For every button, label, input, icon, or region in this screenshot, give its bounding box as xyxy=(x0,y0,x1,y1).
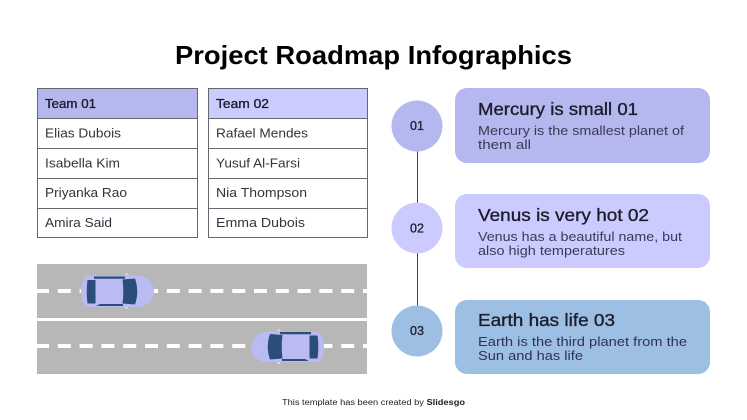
title: Project Roadmap Infographics xyxy=(175,40,572,70)
step circle 01 xyxy=(392,100,442,152)
footer credit: This template has been created by Slidesgo xyxy=(282,398,465,407)
icon: car facing left xyxy=(251,330,324,364)
table: team 02: Yusuf Al-Farsi xyxy=(216,156,300,170)
table: team 01: Priyanka Rao xyxy=(45,186,127,200)
step circle 03: 03 xyxy=(410,324,424,338)
panel: venus: Venus has a beautiful name, but xyxy=(478,230,683,244)
step circle 01: 01 xyxy=(410,119,424,133)
step circle 02 xyxy=(392,202,442,254)
road: top lane with car xyxy=(37,264,367,318)
panel: earth: Earth is the third planet from the xyxy=(478,335,687,349)
table: team 02: Nia Thompson xyxy=(216,186,307,200)
table: team 02 xyxy=(208,88,368,238)
table: team 02: Team 02 xyxy=(216,97,269,111)
step circle 02: 02 xyxy=(410,222,424,236)
table: team 02: Emma Dubois xyxy=(216,216,305,230)
road: bottom lane with car xyxy=(37,321,367,374)
table: team 02: Rafael Mendes xyxy=(216,126,308,140)
table: team 01: Amira Said xyxy=(45,216,112,230)
table: team 01: Team 01 xyxy=(45,97,96,111)
panel: venus: Venus is very hot 02 xyxy=(478,205,649,225)
panel: mercury: them all xyxy=(478,138,531,152)
panel: venus xyxy=(455,194,710,268)
step circle 03 xyxy=(392,306,442,356)
table: team 01: Elias Dubois xyxy=(45,126,121,140)
timeline connector xyxy=(416,150,418,306)
table: team 01 xyxy=(38,88,198,238)
panel: earth: Earth has life 03 xyxy=(478,310,615,330)
panel: mercury: Mercury is small 01 xyxy=(478,99,638,119)
panel: mercury: Mercury is the smallest planet of xyxy=(478,124,685,138)
panel: mercury xyxy=(455,88,710,163)
panel: earth xyxy=(455,300,710,374)
panel: venus: also high temperatures xyxy=(478,244,625,258)
icon: car facing right xyxy=(81,274,154,308)
panel: earth: Sun and has life xyxy=(478,349,583,363)
table: team 01: Isabella Kim xyxy=(45,156,120,170)
